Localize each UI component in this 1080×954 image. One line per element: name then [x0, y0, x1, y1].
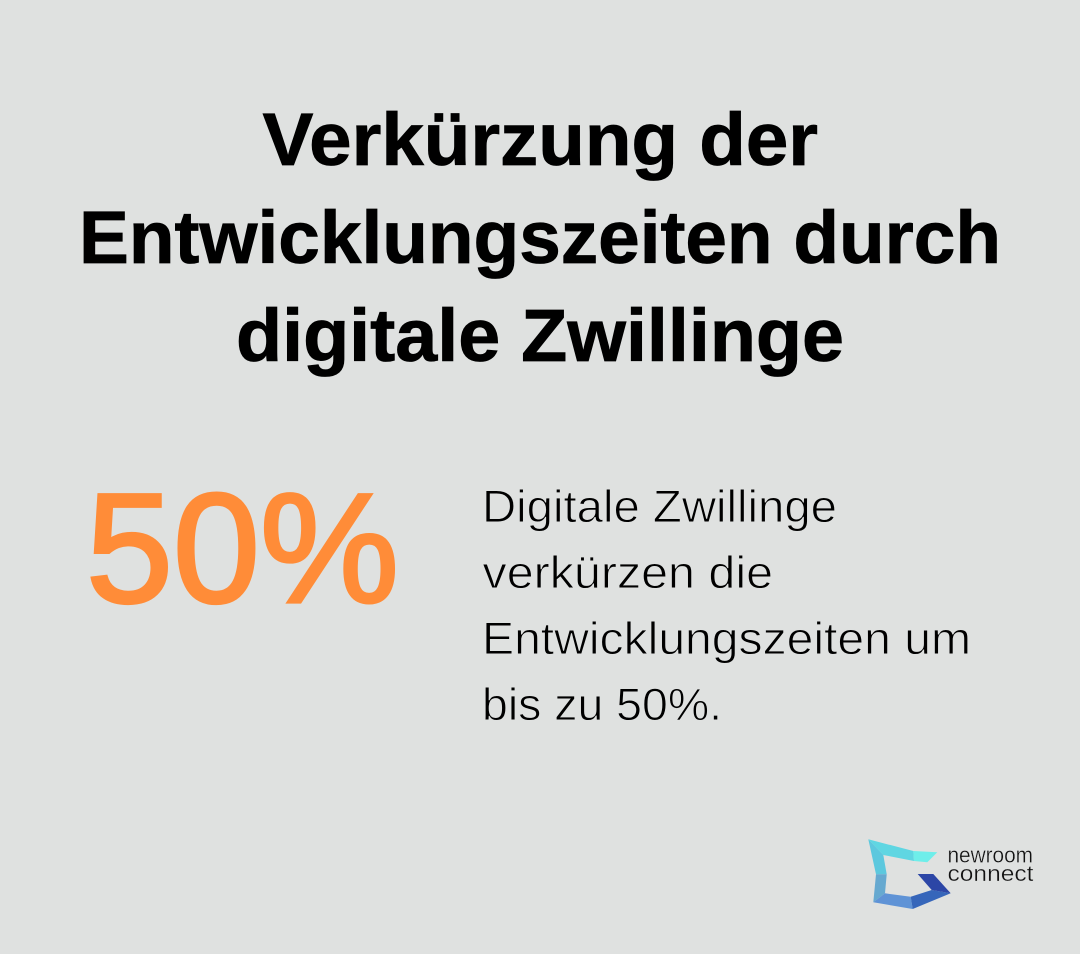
logo: newroom connect — [868, 839, 1034, 909]
logo wordmark — [948, 842, 1034, 886]
title: digitale Zwillinge — [236, 294, 844, 377]
icon: logo mark — [868, 839, 951, 909]
description text: Entwicklungszeiten um — [482, 613, 971, 664]
logo wordmark: connect — [948, 861, 1034, 886]
title: Entwicklungszeiten durch — [79, 196, 1001, 279]
description text — [482, 481, 971, 730]
description text: bis zu 50%. — [482, 679, 722, 730]
logo wordmark: newroom — [948, 842, 1033, 868]
title — [79, 98, 1001, 377]
big statistic: 50%: 50% — [86, 462, 399, 636]
title: Verkürzung der — [262, 98, 818, 181]
description text: Digitale Zwillinge — [482, 481, 837, 532]
description text: verkürzen die — [482, 547, 773, 598]
